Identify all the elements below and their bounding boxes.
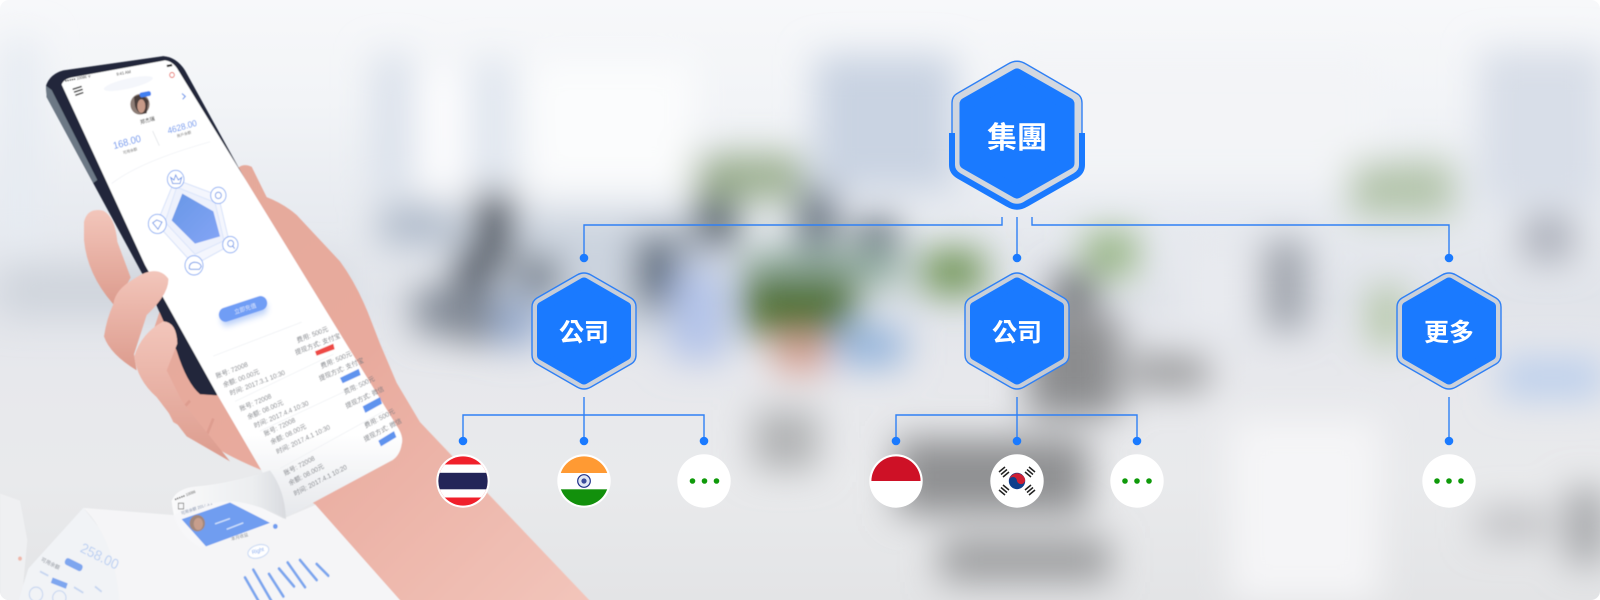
transaction list: 时间: 2017.4.4 10:30 <box>252 398 310 430</box>
transaction list: 余额: 08.00元 <box>246 397 285 422</box>
icon: flag of Indonesia <box>869 454 924 508</box>
screen: status and header: 可用余额 <box>122 146 138 155</box>
hexagon: group: 集團 <box>987 122 1047 155</box>
curled paper underside: 本月收益 <box>230 531 249 543</box>
transaction list: 费用: 500元 <box>342 373 376 397</box>
screen: status and header: 郑杰瑞 <box>139 114 156 126</box>
org chart <box>436 60 1502 508</box>
curled paper underside <box>172 470 286 547</box>
screen: status and header: 9:41 AM <box>116 69 132 77</box>
lower paper sheets: 258.00 <box>78 539 122 573</box>
hexagon: more <box>1397 273 1501 389</box>
transaction list <box>213 322 403 498</box>
transaction list: 提现方式: 支付宝 <box>317 355 365 383</box>
phone screen and paper strip <box>62 60 402 516</box>
transaction list: 余额: 08.00元 <box>287 461 326 488</box>
transaction list: 时间: 2017.4.1 10:20 <box>292 462 349 498</box>
icon: more dots <box>677 454 731 508</box>
curled paper underside: 可用余额 2017.3.1 <box>180 499 214 516</box>
lower paper sheets: 可用余额 <box>40 555 62 572</box>
icon: flag of South Korea <box>990 454 1044 508</box>
screen: status and header: 账户余额 <box>176 129 192 138</box>
hexagon: company 1: 公司 <box>559 319 609 347</box>
transaction list: 账号: 72008 <box>214 359 249 381</box>
hexagon: company 2 <box>965 273 1069 389</box>
hand back and arm <box>143 165 600 600</box>
transaction list: 提现方式: 微信 <box>362 416 403 444</box>
fingers gripping the phone <box>84 210 230 461</box>
hexagon: more: 更多 <box>1424 319 1474 347</box>
transaction list: 提现方式: 支付宝 <box>294 331 342 357</box>
transaction list: 账号: 72008 <box>282 453 316 478</box>
lower paper sheets <box>15 504 410 600</box>
connector dots <box>459 254 1453 445</box>
transaction list: 费用: 500元 <box>363 406 397 430</box>
bar chart on lower paper <box>245 560 328 600</box>
connector lines: group to companies <box>584 217 1449 258</box>
button: 立即充值 <box>233 301 257 316</box>
transaction list: 余额: 08.00元 <box>269 421 308 447</box>
icon: more dots <box>1110 454 1164 508</box>
hexagon: company 1 <box>532 273 636 389</box>
icon: flag of Thailand <box>436 454 490 509</box>
transaction list: 提现方式: 微信 <box>344 384 386 410</box>
transaction list: 账号: 72008 <box>238 391 273 413</box>
screen: status and header: ●●●●● 10086 ᯤ <box>64 74 92 83</box>
screen: status and header <box>64 64 210 184</box>
curled paper underside: ●●●●● 10086 <box>174 490 196 502</box>
transaction list: 时间: 2017.3.1 10:30 <box>228 367 286 398</box>
far-left paper scrap <box>0 494 27 600</box>
transaction list: 账号: 72008 <box>262 415 297 438</box>
button <box>217 294 269 327</box>
transaction list: 余额: 00.00元 <box>222 367 261 389</box>
screen: status and header: 168.00 <box>112 133 142 152</box>
screen: status and header: 4628.00 <box>166 118 198 136</box>
transaction list: 时间: 2017.4.1 10:30 <box>275 422 332 456</box>
radar chart <box>148 170 238 275</box>
hexagon: group <box>952 61 1082 207</box>
connector lines: companies to countries <box>463 397 1449 441</box>
icon: flag of India <box>557 454 612 509</box>
hexagon: company 2: 公司 <box>992 319 1042 347</box>
phone in hand illustration: Right <box>251 547 265 556</box>
phone body <box>46 56 267 395</box>
transaction list: 费用: 500元 <box>295 324 330 345</box>
transaction list: 费用: 500元 <box>319 348 353 370</box>
icon: more dots <box>1422 454 1476 508</box>
